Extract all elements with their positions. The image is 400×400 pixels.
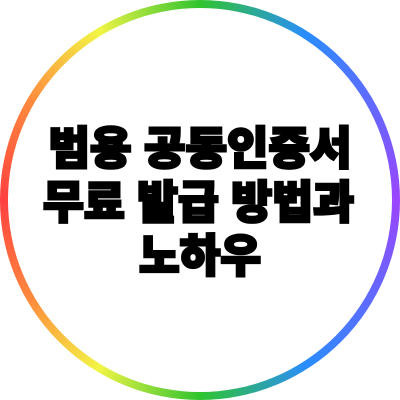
title: 무료 발급 방법과: [43, 177, 354, 228]
title: 범용 공동인증서: [48, 123, 352, 174]
title: 노하우: [139, 230, 261, 282]
